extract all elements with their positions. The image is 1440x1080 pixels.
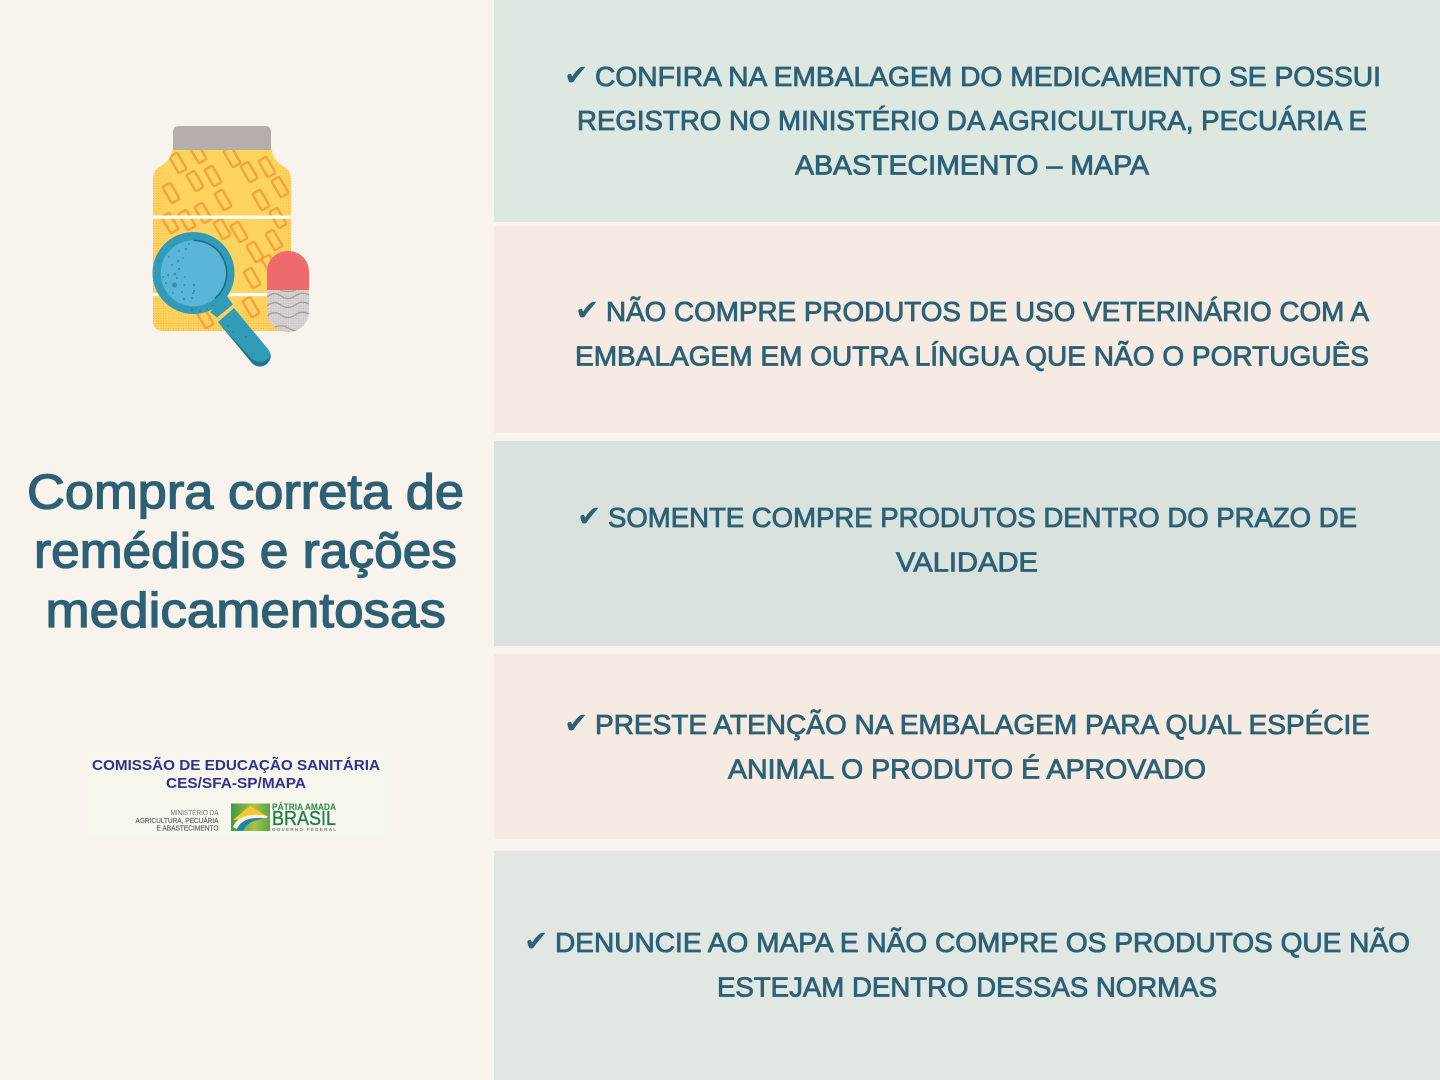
panel: packaging language: ✔ (575, 293, 599, 327)
panel: approved species (494, 654, 1440, 839)
panel: packaging language: NÃO COMPRE PRODUTOS DE USO VETERINÁRIO COM A (606, 296, 1369, 327)
logo: Comissão de Educação Sanitária (88, 752, 388, 838)
logo: Comissão de Educação Sanitária: CES/SFA-SP/MAPA (166, 775, 306, 792)
logo: Comissão de Educação Sanitária: BRASIL (272, 808, 336, 830)
magnifying glass (152, 232, 271, 367)
title: Compra correta de (27, 466, 464, 520)
collar (210, 296, 233, 318)
panel: approved species: PRESTE ATENÇÃO NA EMBALAGEM PARA QUAL ESPÉCIE (595, 709, 1370, 740)
title: medicamentosas (46, 584, 446, 638)
panel: expiry date: ✔ (577, 499, 601, 533)
logo: Comissão de Educação Sanitária: E ABASTECIMENTO (156, 824, 219, 832)
panel: expiry date (494, 441, 1440, 646)
panel: report to MAPA: ESTEJAM DENTRO DESSAS NORMAS (717, 972, 1217, 1002)
logo: Comissão de Educação Sanitária: GOVERNO FEDERAL (272, 827, 336, 832)
panel: registration check: REGISTRO NO MINISTÉRIO DA AGRICULTURA, PECUÁRIA E (577, 105, 1367, 136)
panel: registration check (494, 0, 1440, 222)
panel: registration check: CONFIRA NA EMBALAGEM DO MEDICAMENTO SE POSSUI (595, 61, 1381, 92)
logo: Comissão de Educação Sanitária: MINISTÉRIO DA (170, 808, 218, 817)
logo: Comissão de Educação Sanitária: COMISSÃO DE EDUCAÇÃO SANITÁRIA (92, 756, 380, 774)
panel: expiry date: VALIDADE (896, 546, 1038, 578)
handle (218, 308, 271, 367)
panel: packaging language: EMBALAGEM EM OUTRA LÍNGUA QUE NÃO O PORTUGUÊS (575, 340, 1369, 372)
logo: Comissão de Educação Sanitária: PÁTRIA AMADA (272, 802, 336, 813)
bottle (152, 126, 292, 332)
panel: approved species: ANIMAL O PRODUTO É APROVADO (728, 754, 1206, 784)
panel: report to MAPA: ✔ (524, 924, 548, 958)
panel: expiry date: SOMENTE COMPRE PRODUTOS DENTRO DO PRAZO DE (608, 502, 1357, 533)
panel: report to MAPA (494, 851, 1440, 1080)
title: remédios e rações (34, 524, 457, 578)
icon: medicine bottle with magnifying glass and capsule (152, 126, 309, 367)
panel: packaging language (494, 226, 1440, 433)
title (27, 466, 464, 638)
panel: report to MAPA: DENUNCIE AO MAPA E NÃO COMPRE OS PRODUTOS QUE NÃO (555, 927, 1410, 958)
panel: registration check: ABASTECIMENTO – MAPA (795, 150, 1149, 180)
capsule (267, 251, 309, 332)
panel: registration check: ✔ (564, 58, 588, 92)
logo: Brazilian flag mark (231, 804, 270, 831)
panel: approved species: ✔ (564, 706, 588, 740)
logo: Comissão de Educação Sanitária: AGRICULTURA, PECUÁRIA (136, 816, 218, 825)
